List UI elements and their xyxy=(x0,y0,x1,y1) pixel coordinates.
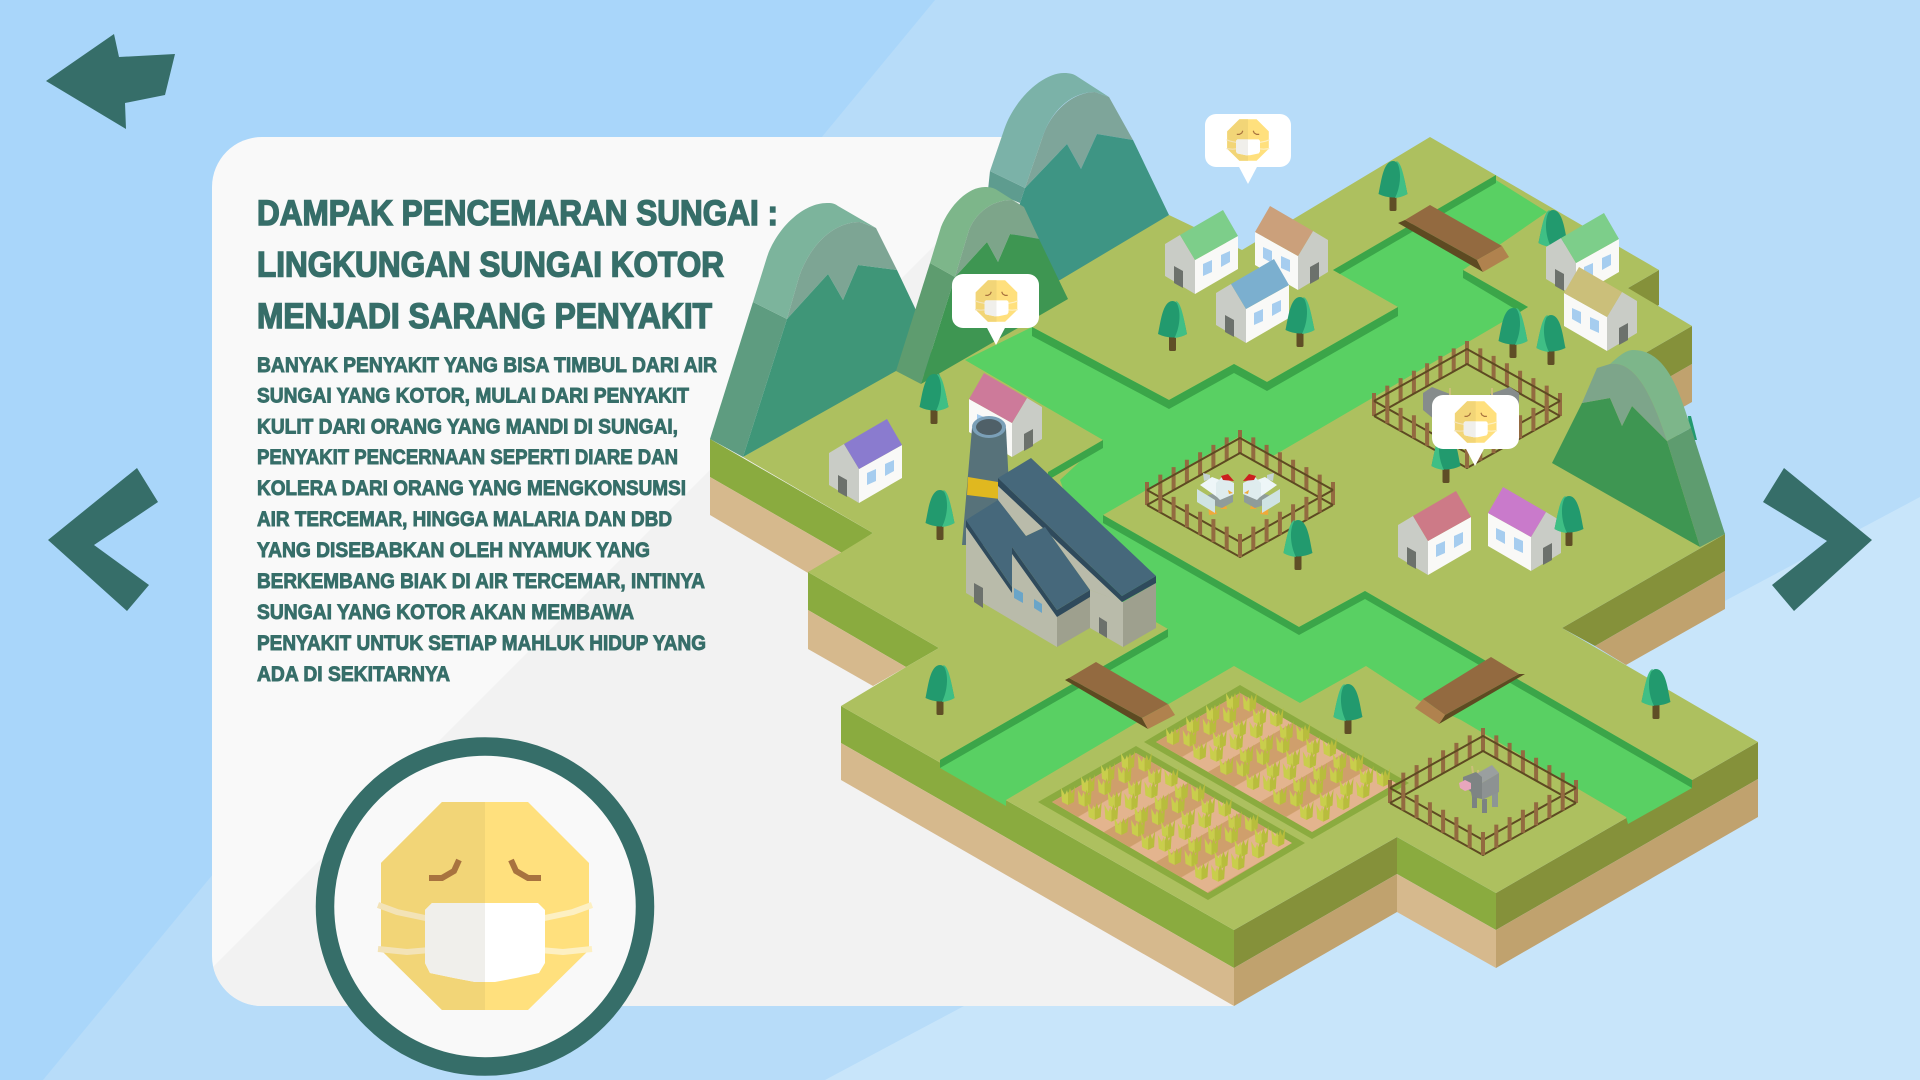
animal: grey cow xyxy=(1459,765,1499,813)
house: magenta roof xyxy=(1488,487,1561,571)
bridge: lower left xyxy=(1065,662,1175,729)
mountain: middle green xyxy=(896,187,1068,384)
title: LINGKUNGAN SUNGAI KOTOR xyxy=(257,246,724,284)
body text: BERKEMBANG BIAK DI AIR TERCEMAR, INTINYA xyxy=(257,570,705,593)
tree: by upper fence xyxy=(1498,308,1528,358)
tree: beside magenta house xyxy=(1554,496,1584,546)
tree: near green house xyxy=(1158,301,1187,351)
tree: near blue house xyxy=(1286,297,1314,347)
house: brown roof xyxy=(1255,206,1328,290)
mountain: left teal green xyxy=(710,203,940,457)
title: DAMPAK PENCEMARAN SUNGAI : xyxy=(257,194,778,233)
body text: PENYAKIT PENCERNAAN SEPERTI DIARE DAN xyxy=(257,446,678,469)
speech bubble: top xyxy=(1205,114,1291,184)
house: green xyxy=(1165,210,1238,294)
icon: large masked face in ring xyxy=(325,746,645,1066)
house: purple roof xyxy=(829,419,902,503)
chicken: right xyxy=(1243,473,1280,515)
isometric land top surface xyxy=(743,137,1758,930)
mountain: right green xyxy=(1552,350,1725,547)
tree: centre field xyxy=(1334,684,1362,734)
speech bubble: right xyxy=(1432,395,1519,466)
body text: ADA DI SEKITARNYA xyxy=(257,663,450,686)
title xyxy=(257,194,778,336)
icon: previous chevron xyxy=(48,468,158,611)
tree: left corner xyxy=(926,665,954,715)
bridge: lower right xyxy=(1415,657,1525,724)
body text: YANG DISEBABKAN OLEH NYAMUK YANG xyxy=(257,539,650,562)
lower animal pen xyxy=(1390,728,1576,855)
chicken pen xyxy=(1147,430,1333,557)
chicken: left xyxy=(1197,473,1234,515)
crop field: lower xyxy=(1038,746,1305,900)
tree: by factory xyxy=(926,490,954,540)
body text: PENYAKIT UNTUK SETIAP MAHLUK HIDUP YANG xyxy=(257,632,706,655)
house: pink roof xyxy=(969,373,1042,457)
body text: AIR TERCEMAR, HINGGA MALARIA DAN DBD xyxy=(257,508,672,531)
house: red roof xyxy=(1398,491,1471,575)
river xyxy=(940,180,1692,824)
tree: top block xyxy=(1378,161,1408,211)
body text: BANYAK PENYAKIT YANG BISA TIMBUL DARI AIR xyxy=(257,354,717,377)
tree: right corner xyxy=(1642,669,1670,719)
body text: KOLERA DARI ORANG YANG MENGKONSUMSI xyxy=(257,477,686,500)
isometric land sides xyxy=(710,270,1758,1006)
icon: back arrow xyxy=(46,34,175,129)
tree: below upper pen xyxy=(1432,433,1460,483)
body text xyxy=(257,354,717,686)
tree: by yellow house xyxy=(1536,315,1566,365)
body text: SUNGAI YANG KOTOR AKAN MEMBAWA xyxy=(257,601,634,624)
upper animal pen xyxy=(1374,341,1560,468)
icon: next chevron xyxy=(1763,468,1872,611)
speech bubble: left xyxy=(952,274,1039,345)
body text: SUNGAI YANG KOTOR, MULAI DARI PENYAKIT xyxy=(257,384,689,408)
tree: behind green house xyxy=(1538,210,1568,260)
panel: text card xyxy=(212,137,1234,1006)
mountain: back teal xyxy=(988,73,1169,300)
crop field: upper xyxy=(1144,685,1409,839)
house: yellow roof xyxy=(1564,267,1637,351)
bridge: upper xyxy=(1398,205,1509,272)
factory chimney xyxy=(962,416,1012,545)
river banks xyxy=(940,175,1692,788)
body text: KULIT DARI ORANG YANG MANDI DI SUNGAI, xyxy=(257,416,678,438)
title: MENJADI SARANG PENYAKIT xyxy=(257,297,712,336)
factory building xyxy=(966,458,1156,647)
house: blue roof xyxy=(1216,259,1289,343)
house: right green xyxy=(1546,213,1619,297)
tree: hillside xyxy=(920,374,948,424)
tree: below chicken pen xyxy=(1284,520,1312,570)
